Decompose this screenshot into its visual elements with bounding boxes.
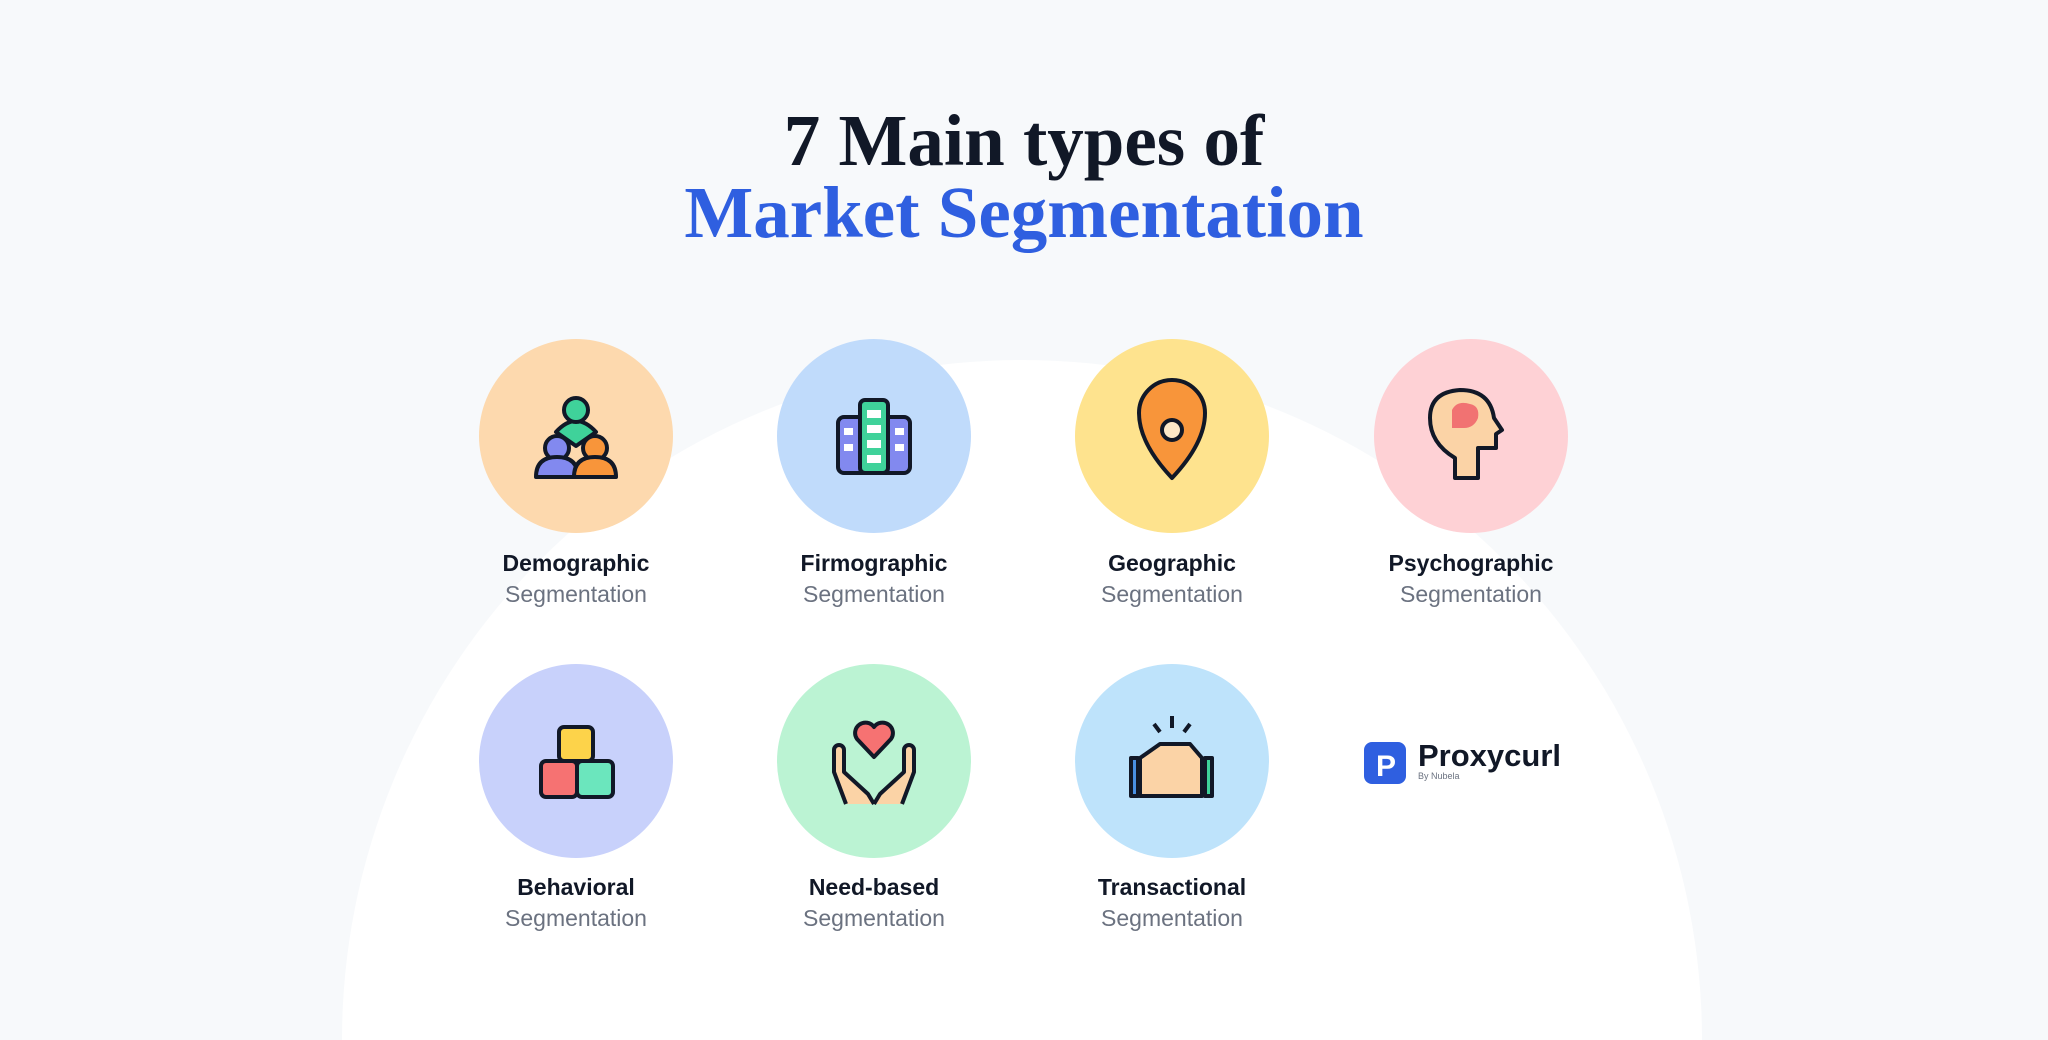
logo: proxycurl: Proxycurl [1418, 738, 1561, 773]
label: behavioral: Behavioral [517, 874, 635, 900]
label: psychographic: Psychographic [1389, 550, 1553, 576]
label: need-based: Segmentation [803, 905, 945, 931]
label: behavioral: Segmentation [505, 905, 647, 931]
label: demographic [502, 550, 649, 607]
label: behavioral [505, 874, 647, 931]
icon: firmographic [777, 339, 971, 533]
label: geographic: Geographic [1108, 550, 1236, 576]
label: transactional [1098, 874, 1246, 931]
logo: proxycurl: P [1376, 750, 1396, 783]
icon: behavioral [479, 664, 673, 858]
icon: transactional [1075, 664, 1269, 858]
label: firmographic: Segmentation [803, 581, 945, 607]
label: need-based [803, 874, 945, 931]
logo: proxycurl [1364, 738, 1561, 784]
label: need-based: Need-based [809, 874, 939, 900]
logo: proxycurl: By Nubela [1418, 771, 1460, 781]
title: Market Segmentation [684, 172, 1364, 253]
title [684, 100, 1364, 253]
label: transactional: Segmentation [1101, 905, 1243, 931]
icon: demographic [479, 339, 673, 533]
icon: geographic [1075, 339, 1269, 533]
label: geographic: Segmentation [1101, 581, 1243, 607]
label: psychographic: Segmentation [1400, 581, 1542, 607]
label: firmographic: Firmographic [801, 550, 947, 576]
icon: psychographic [1374, 339, 1568, 533]
label: demographic: Demographic [502, 550, 649, 576]
title: 7 Main types of [784, 100, 1264, 181]
icon: need-based [777, 664, 971, 858]
label: psychographic [1389, 550, 1553, 607]
label: demographic: Segmentation [505, 581, 647, 607]
label: firmographic [801, 550, 947, 607]
label: transactional: Transactional [1098, 874, 1246, 900]
label: geographic [1101, 550, 1243, 607]
